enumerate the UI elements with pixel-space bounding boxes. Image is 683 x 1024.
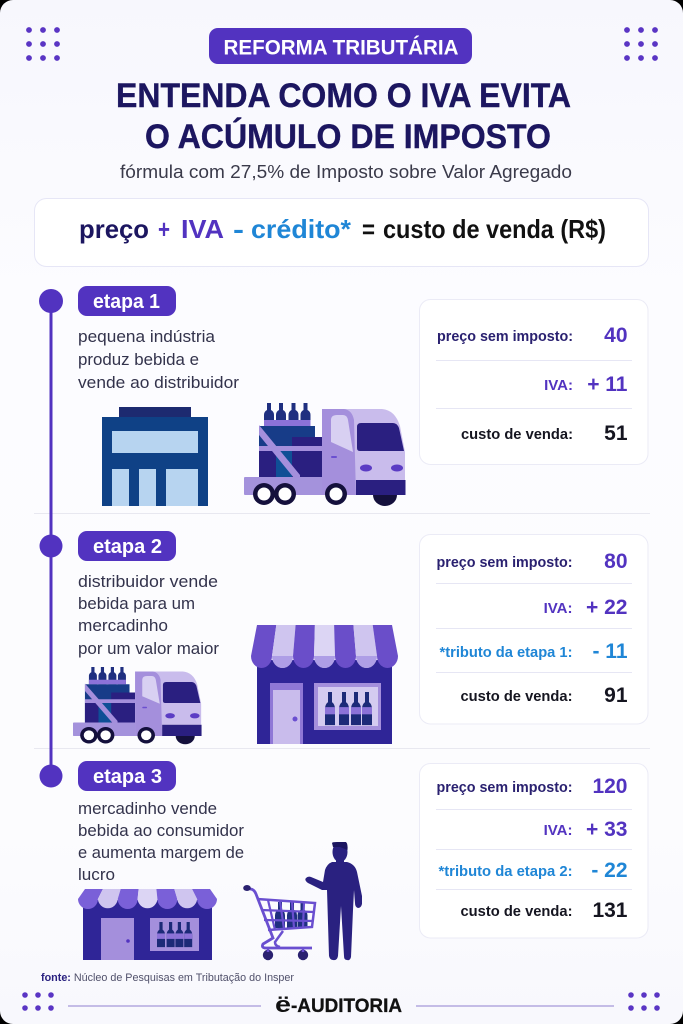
timeline line [50,301,52,776]
formula panel: custo de venda (R$) [383,214,606,244]
tag: reforma tributária [209,28,472,64]
step 1 [39,286,648,506]
decorative dots: top left [26,27,60,61]
step 2 description: mercadinho [78,617,168,635]
step 2 description: distribuidor vende [78,573,218,591]
subtitle: fórmula com 27,5% de Imposto sobre Valor Agregado [120,162,572,182]
formula panel: crédito* [251,214,352,244]
title: O ACÚMULO DE IMPOSTO [145,118,551,156]
values panel: step 3: *tributo da etapa 2: [438,863,572,880]
step 3 label [78,761,176,791]
step 2 [40,531,648,744]
values panel: step 2: *tributo da etapa 1: [440,644,572,661]
step 3 description: bebida ao consumidor [78,822,245,840]
values panel: step 2: preço sem imposto: [436,554,572,571]
values panel: step 2 [420,534,648,724]
values panel: step 1: + 11 [587,373,628,396]
decorative dots: top right [624,27,658,61]
timeline marker 2 [40,534,62,558]
values panel: step 3: preço sem imposto: [436,779,572,796]
values panel: step 3: - 22 [591,859,628,882]
step 1 description [78,328,240,392]
values panel: step 3: 120 [592,775,628,798]
formula panel: preço [79,214,149,244]
footer [22,992,660,1017]
formula panel: + [158,214,170,244]
step 3 description [78,800,245,884]
values panel: step 1 [420,300,648,464]
step 3 description: lucro [78,866,115,884]
formula panel [34,198,648,266]
logo: e-auditoria: ë [275,992,291,1017]
values panel: step 3: + 33 [586,818,628,841]
formula panel: - [233,214,244,244]
step 1 description: pequena indústria [78,328,216,346]
icon: small storefront [78,889,217,960]
values panel: step 2: 91 [604,684,628,707]
formula panel: = [362,214,375,244]
icon: shopping cart [243,885,315,960]
logo: e-auditoria: -AUDITORIA [291,995,402,1017]
icon: factory building [102,407,208,506]
icon: delivery truck 2 [73,667,202,744]
values panel: step 3 [420,764,648,938]
step 2 description [78,573,220,658]
values panel: step 3: IVA: [544,822,572,839]
values panel: step 3: 131 [592,899,628,922]
step 3 description: e aumenta margem de [78,844,244,862]
icon: delivery truck 1 [244,403,406,506]
icon: storefront [251,625,398,744]
values panel: step 1: 40 [604,324,628,347]
timeline marker 3 [40,764,62,788]
values panel: step 2: custo de venda: [460,688,572,705]
values panel: step 2: IVA: [544,600,572,617]
step 2 label: etapa 2 [93,535,162,558]
values panel: step 2: 80 [604,550,628,573]
step 2 description: bebida para um [78,595,195,613]
step 1 description: vende ao distribuidor [78,374,240,392]
step 3 description: mercadinho vende [78,800,217,818]
values panel: step 2: - 11 [592,640,628,663]
timeline marker 1 [39,289,63,313]
step 1 description: produz bebida e [78,351,199,369]
tag: reforma tributária: REFORMA TRIBUTÁRIA [224,36,458,60]
title: ENTENDA COMO O IVA EVITA [116,77,571,115]
step 3 label: etapa 3 [93,765,162,788]
step 2 description: por um valor maior [78,640,220,658]
values panel: step 1: preço sem imposto: [437,328,573,345]
title [116,77,571,156]
step 1 label [78,286,176,316]
values panel: step 1: custo de venda: [461,426,573,443]
values panel: step 1: IVA: [544,377,573,394]
values panel: step 2: + 22 [586,596,628,619]
formula panel: IVA [181,214,224,244]
step 2 label [78,531,176,561]
values panel: step 1: 51 [604,422,628,445]
step 3 [40,761,648,960]
source note: fonte: Núcleo de Pesquisas em Tributação do Insper [41,972,294,984]
icon: customer [305,842,362,960]
step 1 label: etapa 1 [93,290,160,313]
values panel: step 3: custo de venda: [460,903,572,920]
